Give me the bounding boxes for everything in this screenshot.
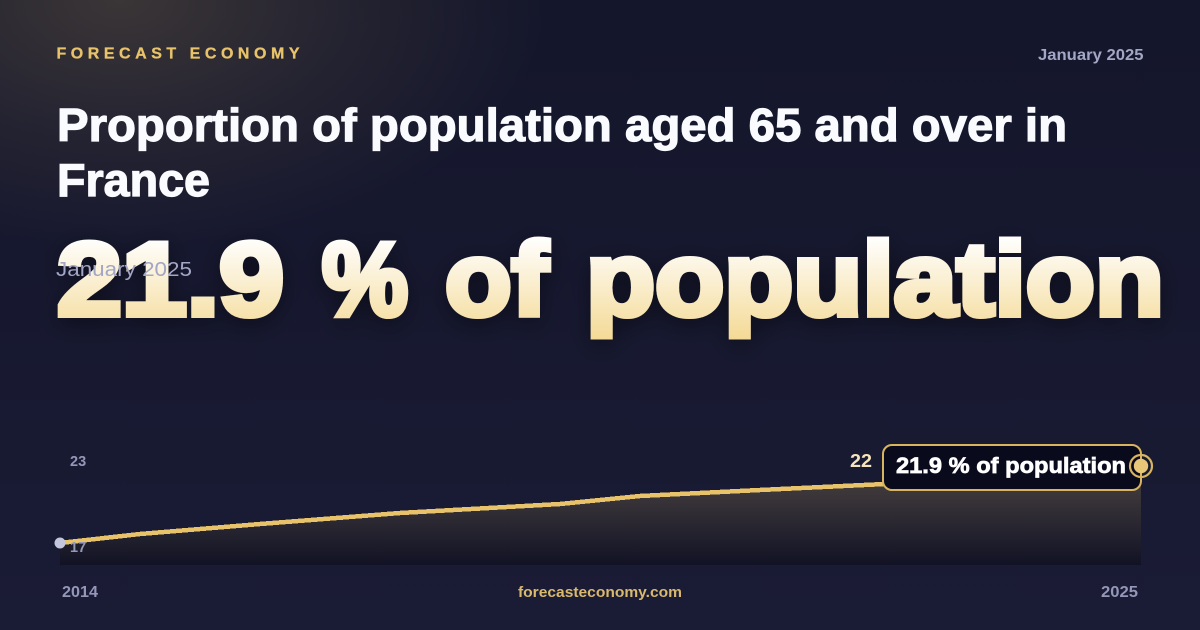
brand label: FORECAST ECONOMY	[56, 46, 300, 62]
title: France	[57, 154, 210, 206]
headline value: %	[322, 222, 408, 338]
axis label 23: 23	[70, 454, 86, 470]
start point	[54, 538, 66, 548]
callout	[883, 445, 1141, 490]
value label 22: 22	[850, 451, 872, 471]
callout: 21.9 % of population	[896, 453, 1126, 478]
headline value: 21.9	[57, 222, 284, 338]
area under line	[60, 484, 1141, 565]
date top right: January 2025	[1038, 47, 1144, 64]
x axis end year: 2025	[1101, 584, 1138, 601]
line chart	[54, 445, 1152, 565]
headline value: of	[445, 222, 548, 338]
headline value	[57, 222, 1164, 338]
source url: forecasteconomy.com	[518, 584, 682, 601]
x axis start year: 2014	[62, 584, 98, 601]
trend line	[60, 484, 885, 543]
end point marker	[1130, 455, 1152, 477]
title	[57, 99, 1067, 206]
overlapping date label: January 2025	[56, 259, 192, 281]
axis label 17: 17	[70, 540, 86, 556]
title: Proportion of population aged 65 and over in	[57, 99, 1067, 151]
headline value: population	[586, 222, 1164, 338]
